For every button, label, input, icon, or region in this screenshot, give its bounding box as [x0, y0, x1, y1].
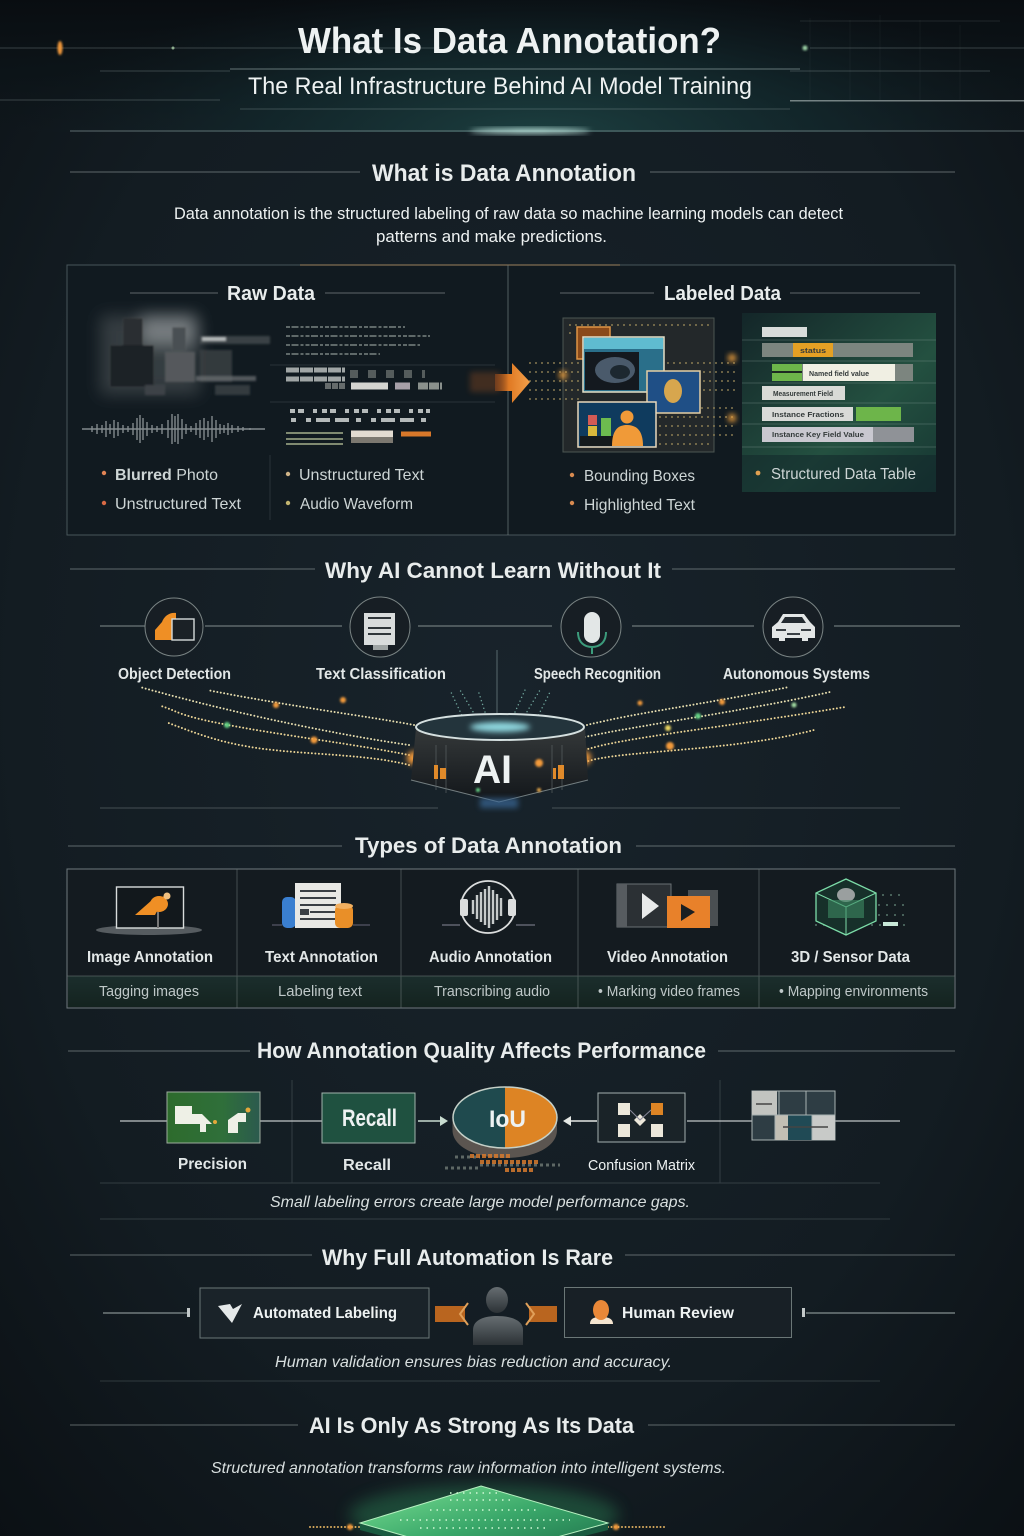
caption: automation: Human validation ensures bias reduction and accuracy. — [275, 1354, 672, 1371]
cylinder — [411, 728, 588, 802]
label: speech recognition: Speech Recognition — [534, 666, 661, 683]
structured data table illustration: Instance Fractions — [772, 412, 844, 419]
heading: what is data annotation: What is Data Annotation — [372, 160, 636, 187]
labeled data labels — [570, 468, 696, 514]
section: annotation quality — [68, 1038, 955, 1219]
heading: quality: How Annotation Quality Affects Performance — [257, 1038, 706, 1063]
structured data table illustration: status — [800, 348, 826, 355]
type: video annotation: Video Annotation — [607, 949, 728, 966]
section: types of data annotation — [67, 833, 955, 1008]
icon: document — [272, 883, 370, 928]
label: recall: Recall — [343, 1157, 391, 1174]
precision box — [167, 1092, 260, 1143]
header banner — [0, 0, 1024, 134]
raw data labels — [102, 467, 425, 513]
type: image annotation: Tagging images — [99, 983, 199, 1000]
arrow: recall to IoU — [418, 1116, 448, 1126]
raw data labels: Unstructured Text — [115, 496, 242, 513]
human review box: Human Review — [622, 1305, 735, 1322]
panel: raw vs labeled data — [67, 265, 955, 535]
label: autonomous systems: Autonomous Systems — [723, 666, 870, 683]
heading: closing: AI Is Only As Strong As Its Data — [309, 1413, 635, 1438]
confusion matrix box — [598, 1093, 685, 1142]
section: why AI cannot learn — [70, 558, 960, 808]
section: automation — [70, 1245, 955, 1381]
icon: text classification — [350, 597, 410, 657]
type: 3D sensor data: 3D / Sensor Data — [791, 949, 910, 966]
type: 3D sensor data: • Mapping environments — [779, 983, 928, 1000]
subtitle: The Real Infrastructure Behind AI Model Training — [248, 73, 752, 100]
icon: object detection — [145, 598, 203, 656]
caption: quality: Small labeling errors create large model performance gaps. — [270, 1194, 690, 1211]
label: text classification: Text Classification — [316, 666, 446, 683]
section: what is data annotation — [70, 160, 955, 246]
definition text: Data annotation is the structured labeling of raw data so machine learning models can detect — [174, 204, 843, 223]
section: closing — [70, 1413, 955, 1536]
type: image annotation: Image Annotation — [87, 949, 213, 966]
pixel grid under IoU — [445, 1156, 560, 1170]
raw data labels: Audio Waveform — [300, 496, 413, 513]
type: text annotation: Text Annotation — [265, 949, 378, 966]
type: image annotation — [87, 887, 213, 1000]
label: object detection: Object Detection — [118, 666, 231, 683]
blurred photo — [100, 315, 270, 395]
IoU disc: IoU — [489, 1106, 526, 1133]
icon: speech recognition — [561, 597, 621, 657]
types table — [67, 869, 955, 1008]
heading: labeled data: Labeled Data — [664, 283, 782, 305]
AI label: AI — [473, 748, 512, 792]
audio waveform — [82, 414, 265, 444]
labeled data labels: Bounding Boxes — [584, 468, 695, 485]
icon: reviewer — [590, 1300, 613, 1324]
heading: automation: Why Full Automation Is Rare — [322, 1245, 613, 1270]
labeled data column — [530, 283, 936, 514]
title: What Is Data Annotation? — [298, 20, 721, 61]
icon: image — [96, 887, 202, 935]
heading: raw data: Raw Data — [227, 283, 316, 305]
label: precision: Precision — [178, 1156, 247, 1173]
icon: 3D cube — [815, 879, 910, 935]
data streams — [140, 687, 845, 765]
raw data labels: Unstructured Text — [299, 467, 425, 484]
AI hub with data streams — [140, 650, 845, 808]
structured data table illustration: Named field value — [809, 371, 869, 378]
type: video annotation — [598, 884, 740, 1000]
raw data labels: Blurred Photo — [115, 467, 218, 484]
definition text: patterns and make predictions. — [376, 227, 607, 246]
matrix grid icon — [752, 1091, 835, 1140]
heading: types: Types of Data Annotation — [355, 833, 622, 858]
type: text annotation: Labeling text — [278, 983, 363, 1000]
closing statement: Structured annotation transforms raw information into intelligent systems. — [211, 1460, 726, 1477]
definition text — [174, 204, 843, 246]
recall box — [322, 1093, 415, 1143]
type: audio annotation — [429, 881, 552, 1000]
type: video annotation: • Marking video frames — [598, 983, 740, 1000]
label: confusion matrix: Confusion Matrix — [588, 1157, 695, 1174]
IoU disc — [452, 1087, 557, 1158]
icon: autonomous systems — [763, 597, 823, 657]
label: structured data table: Structured Data Table — [771, 466, 916, 483]
automated labeling box — [200, 1288, 429, 1338]
structured data table illustration: Instance Key Field Value — [772, 432, 864, 439]
arrow: raw to labeled — [470, 363, 530, 403]
glowing data chip — [310, 1485, 665, 1536]
type: audio annotation: Audio Annotation — [429, 949, 552, 966]
labeled data labels: Highlighted Text — [584, 497, 696, 514]
icon: video — [617, 884, 718, 928]
arrows and person — [435, 1287, 557, 1345]
structured data table illustration — [742, 313, 936, 492]
icon: check — [218, 1304, 242, 1323]
recall box: Recall — [342, 1105, 397, 1132]
raw data column — [82, 283, 445, 513]
type: text annotation — [265, 883, 378, 1000]
human review box — [564, 1288, 792, 1338]
type: audio annotation: Transcribing audio — [434, 983, 550, 1000]
arrow: matrix to IoU — [563, 1116, 597, 1126]
structured data table illustration: Measurement Field — [773, 391, 833, 398]
unstructured text sample — [286, 327, 442, 444]
bounding boxes illustration — [530, 318, 736, 452]
icon: headphones — [442, 881, 535, 933]
heading: why AI cannot learn: Why AI Cannot Learn Without It — [325, 558, 662, 583]
automated labeling box: Automated Labeling — [253, 1305, 397, 1322]
type: 3D sensor data — [779, 879, 928, 1000]
